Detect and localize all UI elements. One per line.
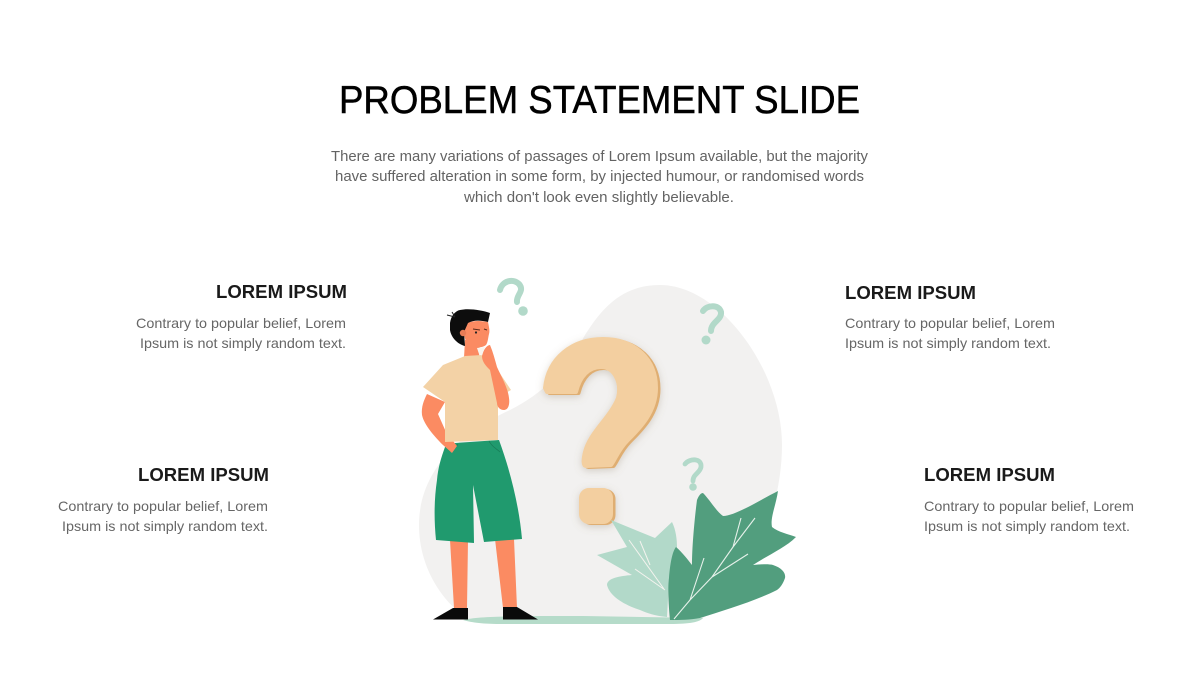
intro paragraph: have suffered alteration in some form, by injected humour, or randomised words <box>335 169 864 185</box>
shorts <box>435 440 522 543</box>
dark leaf <box>668 491 796 620</box>
text block: bottom right: LOREM IPSUM <box>924 465 1055 485</box>
right arm <box>482 345 509 410</box>
intro paragraph: which don't look even slightly believable. <box>463 190 734 206</box>
ear <box>460 330 466 336</box>
text block: top left: Contrary to popular belief, Lorem <box>136 315 346 331</box>
eye <box>475 331 477 334</box>
person <box>422 309 538 620</box>
background blob <box>419 285 782 620</box>
neck <box>464 340 480 358</box>
hair <box>447 309 490 346</box>
text block: bottom right: Contrary to popular belief, Lorem <box>924 498 1134 514</box>
pocket lines <box>452 441 500 452</box>
text block: top right: Contrary to popular belief, Lorem <box>845 315 1055 331</box>
text block: top left: Ipsum is not simply random text. <box>140 335 346 351</box>
shoes <box>433 607 538 620</box>
text block: bottom left <box>58 465 269 534</box>
eyes <box>473 329 487 330</box>
text block: top left: LOREM IPSUM <box>216 282 347 302</box>
text block: bottom right: Ipsum is not simply random text. <box>924 518 1130 534</box>
ground shadow <box>463 616 703 624</box>
text block: bottom right <box>924 465 1134 534</box>
icon: big question mark <box>545 339 658 523</box>
icon: small question mark lower <box>685 460 701 491</box>
text block: top right: LOREM IPSUM <box>845 283 976 303</box>
text block: top right: Ipsum is not simply random text. <box>845 335 1051 351</box>
left arm <box>422 394 457 453</box>
icon: small question mark right <box>702 306 721 344</box>
light leaf <box>597 520 677 617</box>
text block: top left <box>136 282 347 351</box>
icon: small question mark top <box>500 281 528 316</box>
text block: bottom left: LOREM IPSUM <box>138 465 269 485</box>
text block: top right <box>845 283 1055 351</box>
collar shadow <box>477 347 485 356</box>
text block: bottom left: Ipsum is not simply random text. <box>62 518 268 534</box>
illustration <box>419 281 796 624</box>
shirt <box>423 355 511 442</box>
legs <box>450 539 517 608</box>
face <box>464 321 489 347</box>
title: PROBLEM STATEMENT SLIDE <box>339 79 860 122</box>
text block: bottom left: Contrary to popular belief, Lorem <box>58 498 268 514</box>
intro paragraph: There are many variations of passages of Lorem Ipsum available, but the majority <box>331 149 869 165</box>
intro paragraph <box>331 149 869 206</box>
